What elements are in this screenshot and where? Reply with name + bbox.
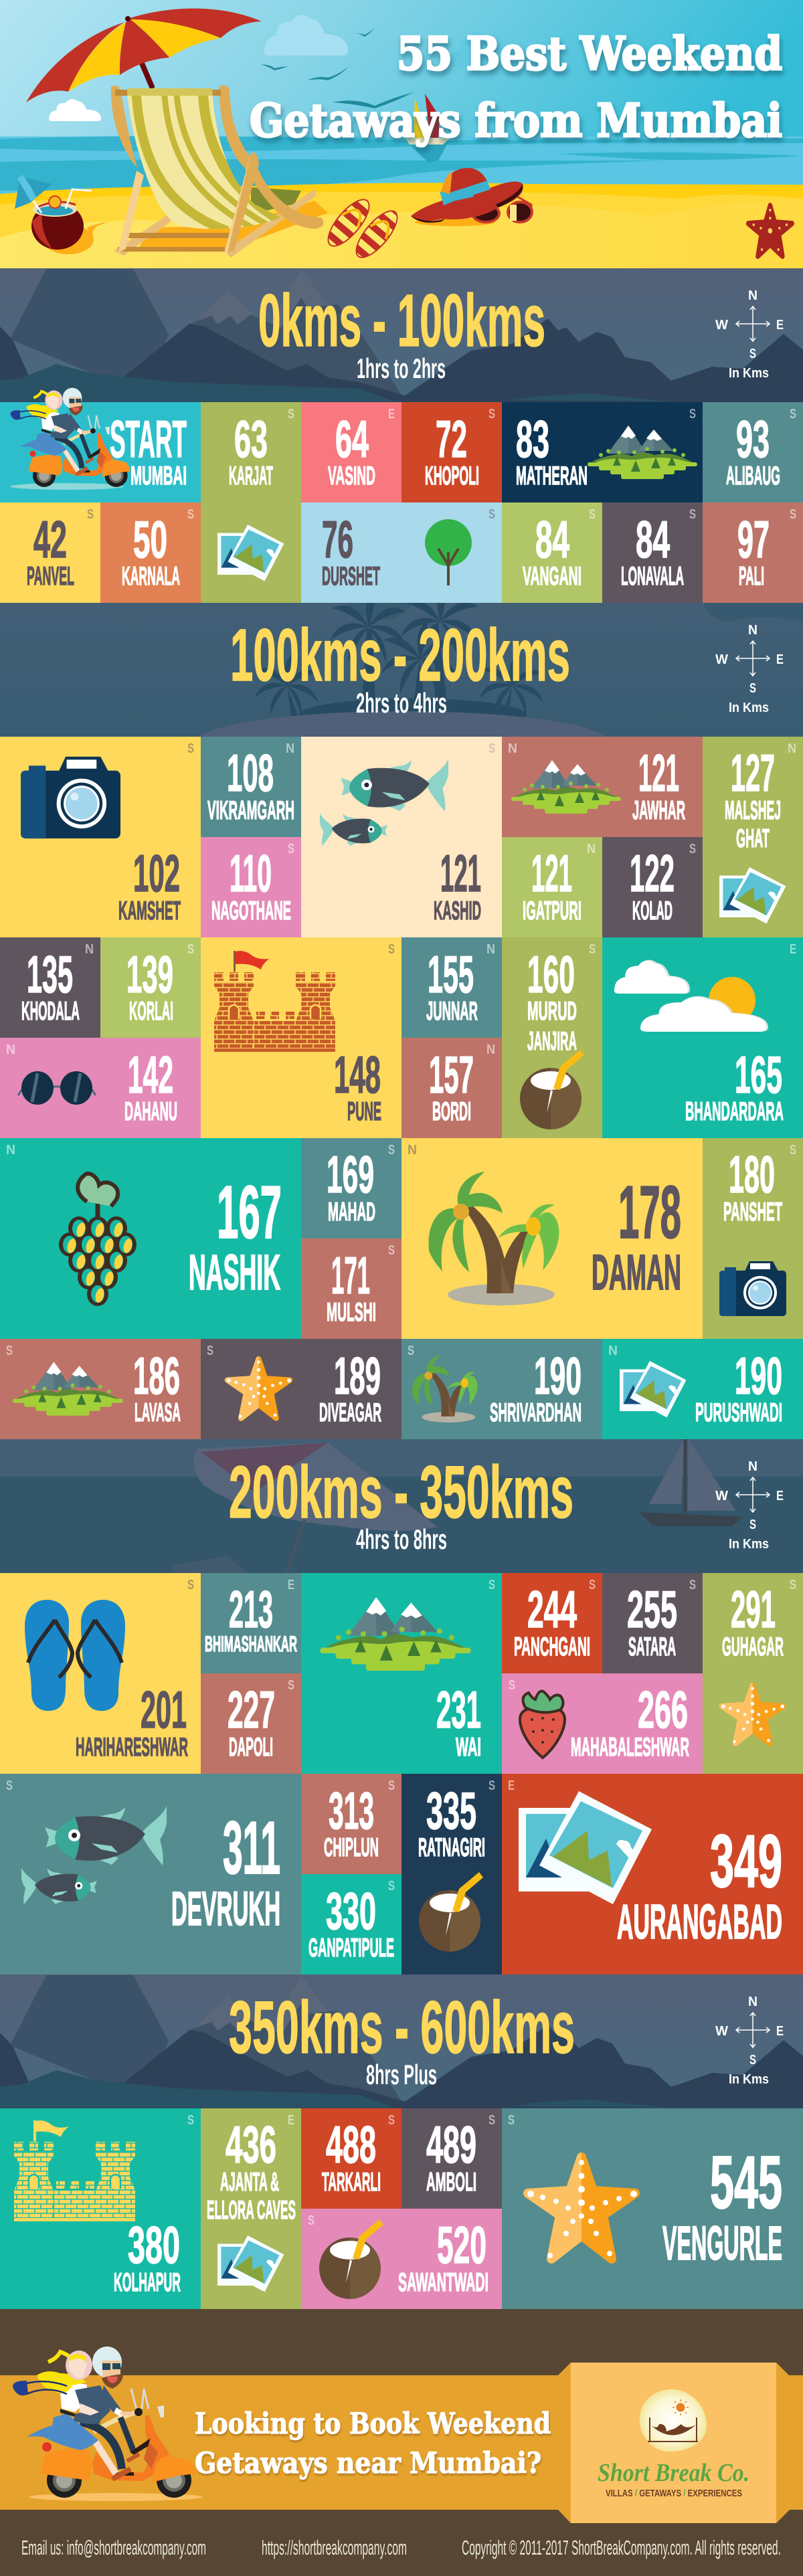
tile: Vasind 64: E: [388, 407, 395, 422]
tile: Tarkarli 488: S: [388, 2113, 395, 2128]
logo panel: Short Break Co.: VILLAS / GETAWAYS / EXPERIENCES: [606, 2488, 742, 2499]
compass: [715, 623, 784, 715]
clouds: [49, 15, 512, 121]
tile: Malshej Ghat 127: [703, 737, 803, 937]
tile: Amboli 489: [402, 2108, 502, 2209]
tile: Shrivardhan 190: S: [408, 1344, 414, 1358]
tile: Start Mumbai: MUMBAI: [130, 462, 187, 490]
tile: Vangani 84: 84: [535, 510, 569, 569]
tile: Vengurle 545: S: [508, 2113, 515, 2128]
tile: Panvel 42: S: [87, 507, 94, 522]
tile: Sawantwadi 520: 520: [437, 2215, 486, 2274]
tile: Mahabaleshwar 266: 266: [638, 1680, 688, 1739]
tile: Pune 148: [201, 937, 402, 1138]
flip flops: [321, 193, 405, 264]
tile: Harihareshwar 201: 201: [141, 1680, 187, 1739]
compass: N: [748, 1459, 757, 1474]
tile: Karnala 50: 50: [133, 510, 167, 569]
tile: Murud Janjira 160: 160: [527, 945, 575, 1004]
footer text: Email us: info@shortbreakcompany.com: [21, 2536, 206, 2559]
icon: mountains: [13, 1362, 123, 1416]
tile: Khodala 135: KHODALA: [21, 997, 80, 1026]
compass: E: [776, 652, 784, 667]
tile: Harihareshwar 201: HARIHARESHWAR: [76, 1733, 188, 1762]
tile: Diveagar 189: DIVEAGAR: [319, 1398, 381, 1427]
tile: Junnar 155: JUNNAR: [426, 997, 478, 1026]
tile: Pali 97: PALI: [739, 562, 764, 591]
logo mark: [640, 2389, 707, 2452]
icon: photos: [620, 1361, 687, 1417]
tile: Alibaug 93: S: [790, 407, 796, 422]
compass: N: [748, 1995, 757, 2009]
tile: Mahabaleshwar 266: S: [509, 1678, 515, 1693]
tile: Dapoli 227: DAPOLI: [229, 1733, 273, 1762]
icon: strawberry: [520, 1691, 565, 1758]
deck chair: [111, 85, 328, 258]
tile: Mahabaleshwar 266: [502, 1673, 703, 1774]
icon: photos: [719, 867, 786, 923]
icon: fort: [214, 951, 335, 1052]
icon: coconut: [419, 1872, 483, 1952]
compass: S: [749, 347, 756, 361]
tile: Khodala 135: [0, 937, 100, 1038]
compass: E: [776, 1489, 784, 1503]
tile: Dapoli 227: 227: [228, 1680, 275, 1739]
tile: Matheran 83: [502, 402, 703, 502]
tile: Shrivardhan 190: SHRIVARDHAN: [490, 1398, 582, 1427]
tile: Vangani 84: S: [589, 507, 596, 522]
tile: Junnar 155: [402, 937, 502, 1038]
tile: Daman 178: N: [408, 1143, 417, 1158]
compass: In Kms: [729, 366, 769, 381]
tile: Kashid 121: S: [488, 741, 495, 756]
umbrella: [26, 9, 262, 102]
tile: Daman 178: DAMAN: [592, 1245, 681, 1300]
sailboat: [405, 94, 450, 163]
tile: Durshet 76: S: [488, 507, 495, 522]
tile: Vengurle 545: [502, 2108, 803, 2309]
tile: Kolad 122: KOLAD: [632, 897, 673, 925]
tile: Harihareshwar 201: [0, 1573, 201, 1774]
tile: Murud Janjira 160: MURUD: [527, 997, 577, 1026]
tile: Vikramgarh 108: N: [286, 741, 294, 756]
tile: Kolhapur 380: KOLHAPUR: [114, 2268, 181, 2297]
tile: Kolhapur 380: S: [187, 2113, 194, 2128]
tile: Mulshi 171: 171: [331, 1246, 370, 1305]
tile: Mulshi 171: S: [388, 1243, 395, 1258]
tile: Bordi 157: BORDI: [432, 1097, 471, 1126]
tile: Igatpuri 121: IGATPURI: [523, 897, 582, 925]
tile: Wai 231: S: [488, 1578, 495, 1592]
section band: 0kms - 100kms: [0, 268, 803, 402]
icon: starfish: [527, 2157, 637, 2259]
tile: Matheran 83: S: [689, 407, 696, 422]
tile: Panvel 42: [0, 502, 100, 603]
tile: Dapoli 227: S: [288, 1678, 294, 1693]
tile: Panshet 180: S: [790, 1143, 796, 1158]
tile: Mahad 169: MAHAD: [328, 1198, 375, 1226]
tile: Ajanta and Ellora Caves 436: AJANTA &: [220, 2168, 279, 2197]
tile: Amboli 489: 489: [426, 2115, 476, 2174]
tile: Vikramgarh 108: [201, 737, 301, 837]
tile: Kashid 121: KASHID: [434, 897, 481, 925]
tile: Chiplun 313: 313: [329, 1781, 374, 1840]
tile: Guhagar 291: [703, 1573, 803, 1774]
tile: Nagothane 110: [201, 837, 301, 937]
tile: Dahanu 142: 142: [128, 1045, 173, 1104]
tile: Sawantwadi 520: SAWANTWADI: [398, 2268, 488, 2297]
tile: Satara 255: [602, 1573, 703, 1673]
tile: Devrukh 311: 311: [223, 1807, 280, 1890]
icon: fort: [14, 2120, 135, 2222]
tile: Nagothane 110: S: [288, 842, 294, 856]
compass: In Kms: [729, 1537, 769, 1552]
tile: Kolhapur 380: [0, 2108, 201, 2309]
icon: grapes: [59, 1174, 137, 1306]
coconut drink: [15, 177, 109, 254]
icon: mountains: [511, 760, 621, 814]
tile: Ajanta and Ellora Caves 436: [201, 2108, 301, 2309]
tile: Lavasa 186: LAVASA: [135, 1398, 181, 1427]
tile: Pali 97: [703, 502, 803, 603]
tile: Chiplun 313: [301, 1774, 402, 1874]
tile: Ajanta and Ellora Caves 436: E: [288, 2113, 294, 2128]
tile: Vasind 64: VASIND: [328, 462, 375, 490]
tile: Panchgani 244: S: [589, 1578, 596, 1592]
footer text: [21, 2536, 781, 2559]
tile: Khopoli 72: 72: [436, 409, 467, 468]
tile: Jawhar 121: JAWHAR: [632, 796, 685, 825]
tile: Ratnagiri 335: [402, 1774, 502, 1974]
tile: Mahad 169: [301, 1138, 402, 1238]
tile: Vangani 84: [502, 502, 602, 603]
tile: Purushwadi 190: N: [608, 1344, 618, 1358]
tile: Panchgani 244: PANCHGANI: [514, 1633, 590, 1661]
icon: mountains: [320, 1597, 471, 1671]
tile: Kolad 122: [602, 837, 703, 937]
icon: starfish: [227, 1359, 291, 1418]
tile: Bordi 157: N: [486, 1042, 495, 1057]
tile: Junnar 155: N: [486, 942, 495, 957]
icon: tree: [425, 519, 472, 585]
compass: W: [715, 318, 728, 333]
compass: W: [715, 652, 728, 667]
tile: Jawhar 121: [502, 737, 703, 837]
tile: Kolad 122: 122: [630, 844, 675, 903]
icon: couple on scooter: [11, 388, 130, 487]
tile: Bhimashankar 213: [201, 1573, 301, 1673]
tile: Karjat 63: KARJAT: [229, 462, 273, 490]
tile: Karnala 50: [100, 502, 201, 603]
tile: Lavasa 186: S: [6, 1344, 13, 1358]
compass: N: [748, 288, 757, 303]
icon: coconut: [520, 1050, 584, 1130]
icon: photos: [217, 2235, 284, 2292]
tile: Matheran 83: MATHERAN: [516, 462, 588, 490]
tile: Vasind 64: 64: [335, 409, 369, 468]
tile: Panchgani 244: [502, 1573, 602, 1673]
tile: Tarkarli 488: 488: [326, 2115, 376, 2174]
tile: Khopoli 72: KHOPOLI: [425, 462, 479, 490]
tile: Guhagar 291: S: [790, 1578, 796, 1592]
tile: Amboli 489: S: [488, 2113, 495, 2128]
section band: 100kms - 200kms: [0, 603, 803, 737]
tile: Lavasa 186: 186: [133, 1346, 180, 1405]
section band: 350kms - 600kms: 8hrs Plus: [366, 2059, 437, 2090]
tile: Bordi 157: 157: [429, 1045, 474, 1104]
tile: Aurangabad 349: [502, 1774, 803, 1974]
tile: Panshet 180: [703, 1138, 803, 1339]
tile: Igatpuri 121: 121: [531, 844, 572, 903]
tile: Start Mumbai: START: [110, 409, 187, 468]
tile: Mahad 169: 169: [327, 1145, 374, 1204]
tile: Diveagar 189: 189: [334, 1346, 381, 1405]
tile: Karjat 63: S: [288, 407, 294, 422]
tile: Murud Janjira 160: S: [589, 942, 596, 957]
tile: Malshej Ghat 127: N: [788, 741, 796, 756]
tile: Kamshet 102: S: [187, 741, 194, 756]
tile: Bhandardara 165: [602, 937, 803, 1138]
tile: Bhandardara 165: E: [790, 942, 796, 957]
tile: Durshet 76: DURSHET: [322, 562, 380, 591]
icon: sunglasses: [18, 1071, 96, 1105]
compass: In Kms: [729, 701, 769, 715]
tile: Kashid 121: [301, 737, 502, 937]
icon: photos: [519, 1791, 652, 1904]
tile: Nashik 167: [0, 1138, 301, 1339]
tile: Ganpatipule 330: [301, 1874, 402, 1974]
tile: Nagothane 110: 110: [230, 844, 272, 903]
tile: Nagothane 110: NAGOTHANE: [211, 897, 291, 925]
tile: Purushwadi 190: [602, 1339, 803, 1439]
title: [250, 27, 782, 148]
icon: blue flip flops: [25, 1600, 125, 1711]
tile: Amboli 489: AMBOLI: [426, 2168, 476, 2197]
tile: Kamshet 102: 102: [133, 844, 180, 903]
tile: Bhimashankar 213: 213: [229, 1580, 273, 1639]
header: beach illustration: [0, 0, 803, 268]
tile: Bhimashankar 213: BHIMASHANKAR: [205, 1632, 297, 1656]
icon: mountains: [588, 426, 697, 479]
tile: Ratnagiri 335: 335: [426, 1781, 476, 1840]
tile: Korlai 139: [100, 937, 201, 1038]
tile: Bordi 157: [402, 1038, 502, 1138]
icon: fish: [319, 759, 449, 846]
tile: Karnala 50: S: [187, 507, 194, 522]
tile: Khopoli 72: S: [488, 407, 495, 422]
tile: Alibaug 93: [703, 402, 803, 502]
tile: Aurangabad 349: E: [508, 1778, 515, 1793]
tile: Nashik 167: N: [6, 1143, 15, 1158]
tile: Panchgani 244: 244: [527, 1580, 577, 1639]
tile: Khodala 135: 135: [27, 945, 73, 1004]
tile: Harihareshwar 201: S: [187, 1578, 194, 1592]
tile: Devrukh 311: S: [6, 1778, 13, 1793]
tile: Nashik 167: NASHIK: [189, 1245, 280, 1300]
compass: In Kms: [729, 2072, 769, 2087]
tile: Vikramgarh 108: 108: [227, 743, 274, 802]
icon: clouds and sun: [614, 960, 768, 1032]
tile: Murud Janjira 160: JANJIRA: [527, 1027, 577, 1056]
section band: 0kms - 100kms: 0kms - 100kms: [258, 280, 545, 362]
call to action text: Getaways near Mumbai?: [195, 2447, 541, 2480]
section band: 350kms - 600kms: [0, 1974, 803, 2108]
compass: S: [749, 2053, 756, 2067]
tile: Diveagar 189: S: [207, 1344, 213, 1358]
tile: Chiplun 313: CHIPLUN: [324, 1833, 379, 1862]
tile: Satara 255: S: [689, 1578, 696, 1592]
tile: Sawantwadi 520: S: [308, 2213, 315, 2228]
icon: palm tree: [412, 1356, 478, 1422]
call to action text: [195, 2407, 551, 2480]
icon: camera: [21, 757, 120, 838]
footer background: [0, 2309, 803, 2576]
tile: Daman 178: 178: [618, 1171, 681, 1254]
tile: Durshet 76: 76: [322, 510, 353, 569]
tile: Kamshet 102: KAMSHET: [118, 897, 181, 925]
tile: Pali 97: S: [790, 507, 796, 522]
tile: Shrivardhan 190: [402, 1339, 602, 1439]
tile: Lonavala 84: [602, 502, 703, 603]
footer text: https://shortbreakcompany.com: [262, 2536, 407, 2559]
compass: [715, 1459, 784, 1552]
compass: S: [749, 681, 756, 696]
icon: photos: [217, 525, 284, 581]
compass: E: [776, 2024, 784, 2039]
tile: Bhimashankar 213: E: [288, 1578, 294, 1592]
tile: Kashid 121: 121: [440, 844, 481, 903]
tile: Panvel 42: PANVEL: [27, 562, 74, 591]
tile: Khopoli 72: [402, 402, 502, 502]
tile: Igatpuri 121: N: [587, 842, 596, 856]
icon: couple on scooter: [13, 2347, 196, 2498]
compass: E: [776, 318, 784, 333]
tile: Lavasa 186: [0, 1339, 201, 1439]
tile: Junnar 155: 155: [428, 945, 474, 1004]
tile: Kolad 122: S: [689, 842, 696, 856]
tile: Vasind 64: [301, 402, 402, 502]
tile: Satara 255: 255: [627, 1580, 677, 1639]
icon: fish: [21, 1806, 167, 1904]
tile: Chiplun 313: S: [388, 1778, 395, 1793]
tile: Dahanu 142: N: [6, 1042, 15, 1057]
tile: Pune 148: S: [388, 942, 395, 957]
tile: Shrivardhan 190: 190: [534, 1346, 582, 1405]
compass: [715, 288, 784, 381]
tile: Tarkarli 488: [301, 2108, 402, 2209]
section band: 100kms - 200kms: 2hrs to 4hrs: [356, 687, 447, 719]
tile: Nashik 167: 167: [217, 1171, 282, 1254]
section band: 0kms - 100kms: 1hrs to 2hrs: [357, 353, 446, 384]
section band: 200kms - 350kms: [0, 1439, 803, 1573]
sun hat and sunglasses: [411, 168, 532, 226]
tile: Devrukh 311: [0, 1774, 301, 1974]
tile: Mulshi 171: [301, 1238, 402, 1339]
compass: W: [715, 2024, 728, 2039]
logo panel: Short Break Co.: Short Break Co.: [598, 2459, 749, 2487]
red starfish: [748, 205, 792, 256]
tile: Dahanu 142: [0, 1038, 201, 1138]
tile: Ganpatipule 330: GANPATIPULE: [308, 1934, 394, 1962]
tile: Karnala 50: KARNALA: [122, 562, 180, 591]
tile: Alibaug 93: 93: [736, 409, 770, 468]
tile: Dapoli 227: [201, 1673, 301, 1774]
icon: camera: [719, 1261, 786, 1316]
tile: Sawantwadi 520: [301, 2209, 502, 2309]
tile: Vangani 84: VANGANI: [523, 562, 582, 591]
tile: Lonavala 84: LONAVALA: [621, 562, 684, 591]
tile: Lonavala 84: S: [689, 507, 696, 522]
tile: Ganpatipule 330: S: [388, 1879, 395, 1894]
tile: Karjat 63: [201, 402, 301, 603]
tile: Daman 178: [402, 1138, 703, 1339]
compass: [715, 1995, 784, 2087]
tile: Korlai 139: KORLAI: [129, 997, 173, 1026]
call to action banner: [0, 2347, 803, 2523]
logo panel: Short Break Co.: [571, 2363, 776, 2523]
compass: N: [748, 623, 757, 638]
tile: Satara 255: SATARA: [628, 1633, 676, 1661]
tile: Panvel 42: 42: [33, 510, 67, 569]
icon: starfish: [721, 1685, 784, 1744]
tile: Ratnagiri 335: S: [488, 1778, 495, 1793]
tile: Lonavala 84: 84: [636, 510, 670, 569]
tile: Devrukh 311: DEVRUKH: [171, 1883, 280, 1936]
tile: Pune 148: PUNE: [347, 1097, 381, 1126]
tile: Mahad 169: S: [388, 1143, 395, 1158]
tile: Wai 231: WAI: [456, 1733, 481, 1762]
tile: Kamshet 102: [0, 737, 201, 937]
tile: Pali 97: 97: [737, 510, 770, 569]
tile: Khodala 135: N: [85, 942, 94, 957]
section band: 200kms - 350kms: 4hrs to 8hrs: [356, 1524, 447, 1555]
tile: Durshet 76: [301, 502, 502, 603]
tile: Igatpuri 121: [502, 837, 602, 937]
tile: Ajanta and Ellora Caves 436: 436: [226, 2115, 276, 2174]
compass: S: [749, 1517, 756, 1532]
text: ELLORA CAVES: [207, 2196, 296, 2225]
icon: palm tree: [429, 1172, 559, 1305]
birds: [261, 28, 414, 108]
tile: Vikramgarh 108: VIKRAMGARH: [207, 796, 294, 825]
tile: Ganpatipule 330: 330: [326, 1881, 376, 1940]
tile: Mulshi 171: MULSHI: [327, 1298, 376, 1327]
tile: Wai 231: [301, 1573, 502, 1774]
tile: Korlai 139: 139: [126, 945, 173, 1004]
tile: Karjat 63: 63: [234, 409, 268, 468]
tile: Pune 148: 148: [334, 1045, 381, 1104]
tile: Ratnagiri 335: RATNAGIRI: [418, 1833, 485, 1862]
tile: Korlai 139: S: [187, 942, 194, 957]
tile: Jawhar 121: 121: [638, 743, 679, 802]
tile: Diveagar 189: [201, 1339, 402, 1439]
tile: Murud Janjira 160: [502, 937, 602, 1138]
icon: coconut: [319, 2219, 383, 2300]
tile: Start Mumbai: [0, 388, 201, 502]
tile: Jawhar 121: N: [508, 741, 517, 756]
tile: Dahanu 142: DAHANU: [124, 1097, 177, 1126]
tile: Kolhapur 380: 380: [128, 2215, 180, 2274]
call to action text: Looking to Book Weekend: [195, 2407, 551, 2441]
tile: Tarkarli 488: TARKARLI: [322, 2168, 381, 2197]
tile: Wai 231: 231: [436, 1680, 481, 1739]
tile: Matheran 83: 83: [516, 409, 549, 468]
compass: W: [715, 1489, 728, 1503]
